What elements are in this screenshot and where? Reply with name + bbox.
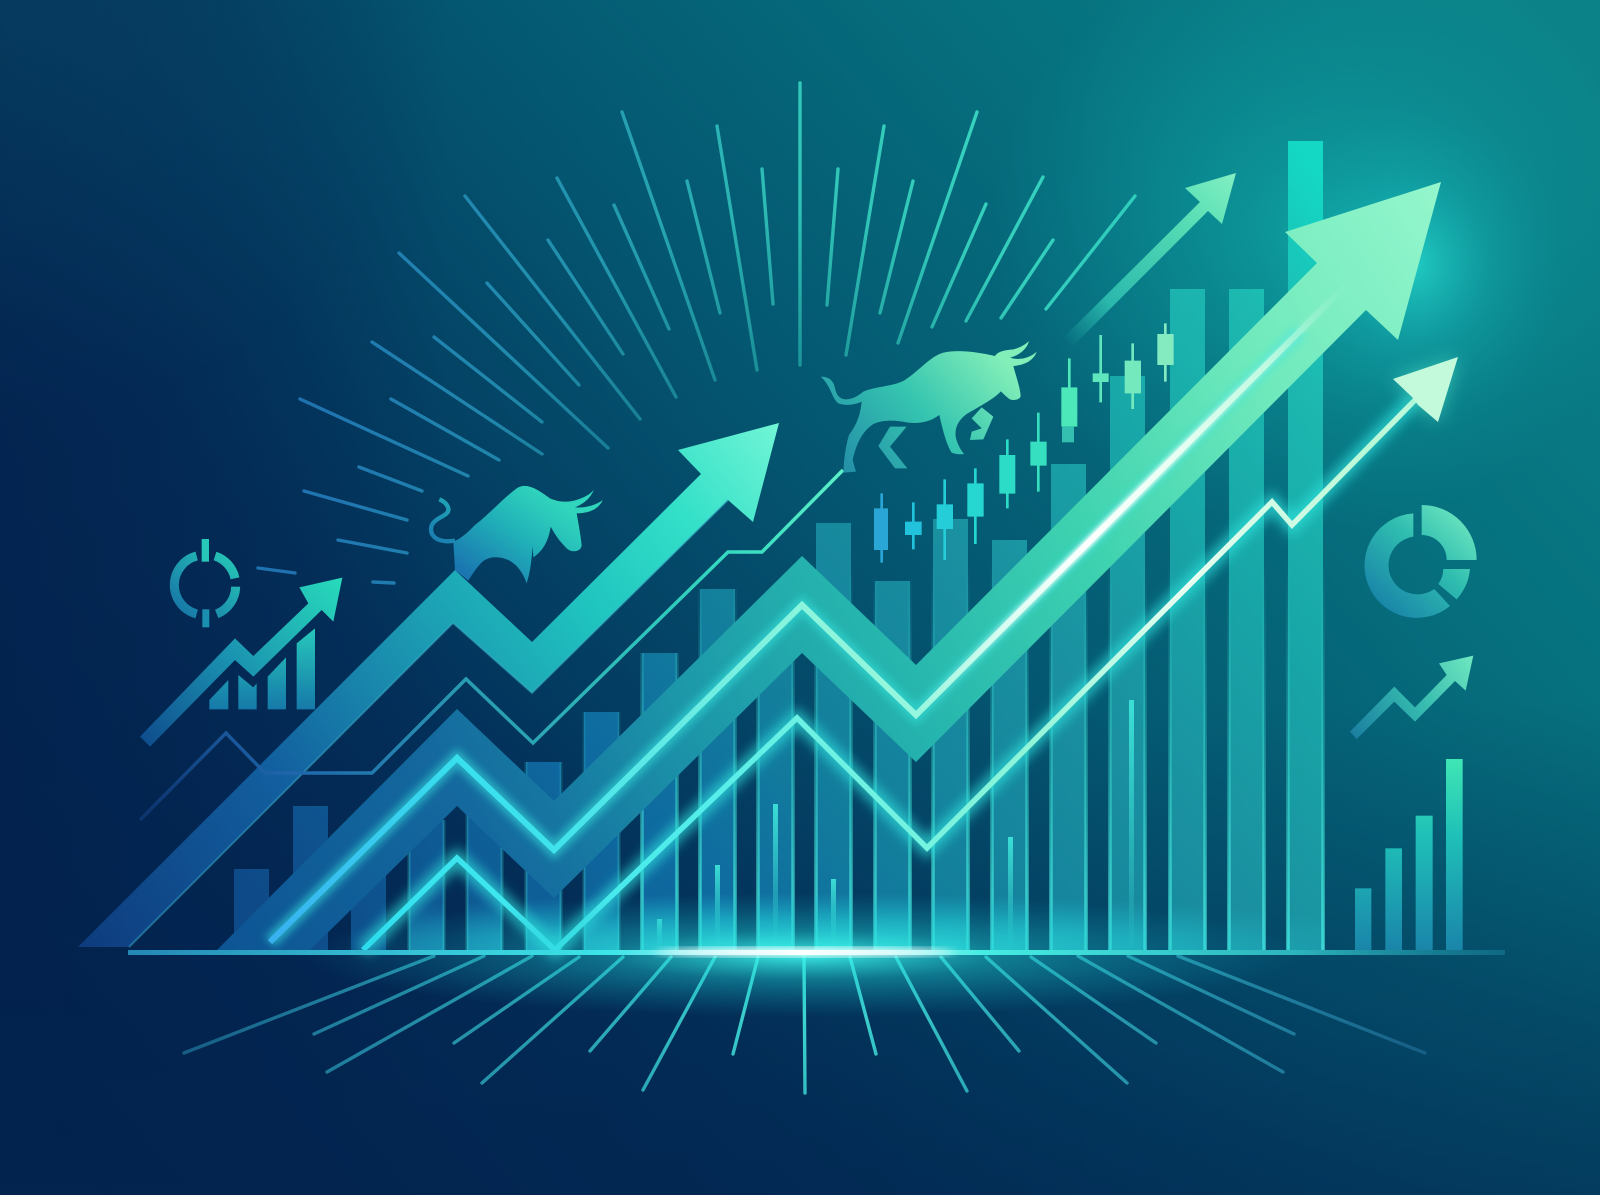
glowing line inside main arrow <box>270 271 1360 942</box>
candlesticks <box>874 323 1174 563</box>
icon: donut chart <box>1364 505 1477 618</box>
thin inner bars <box>657 700 1134 947</box>
base glow on bars <box>409 880 1323 950</box>
sunburst rays below the baseline <box>184 956 1425 1093</box>
icon: segmented ring <box>174 539 236 627</box>
icon: bull on lower arrow <box>431 486 603 583</box>
icon: small zigzag arrow right <box>1350 656 1473 739</box>
rising bar chart columns <box>234 141 1323 950</box>
mini bar chart right <box>1355 759 1463 950</box>
top right secondary arrow <box>1064 173 1236 346</box>
glow behind main arrow head <box>990 0 1600 530</box>
sunburst rays above the chart <box>258 83 1135 583</box>
baseline with central glow <box>128 893 1505 1017</box>
icon: bull leaping on upper line <box>821 341 1037 473</box>
back zigzag arrow <box>78 423 779 947</box>
small left zigzag arrow with mini bars <box>140 578 342 747</box>
thin rising line arrow <box>363 357 1458 950</box>
main zigzag growth arrow <box>217 182 1441 950</box>
lit edges on left bars <box>409 712 619 950</box>
lit edges on right bars <box>642 141 1323 950</box>
thin zigzag line to bull <box>140 470 843 820</box>
